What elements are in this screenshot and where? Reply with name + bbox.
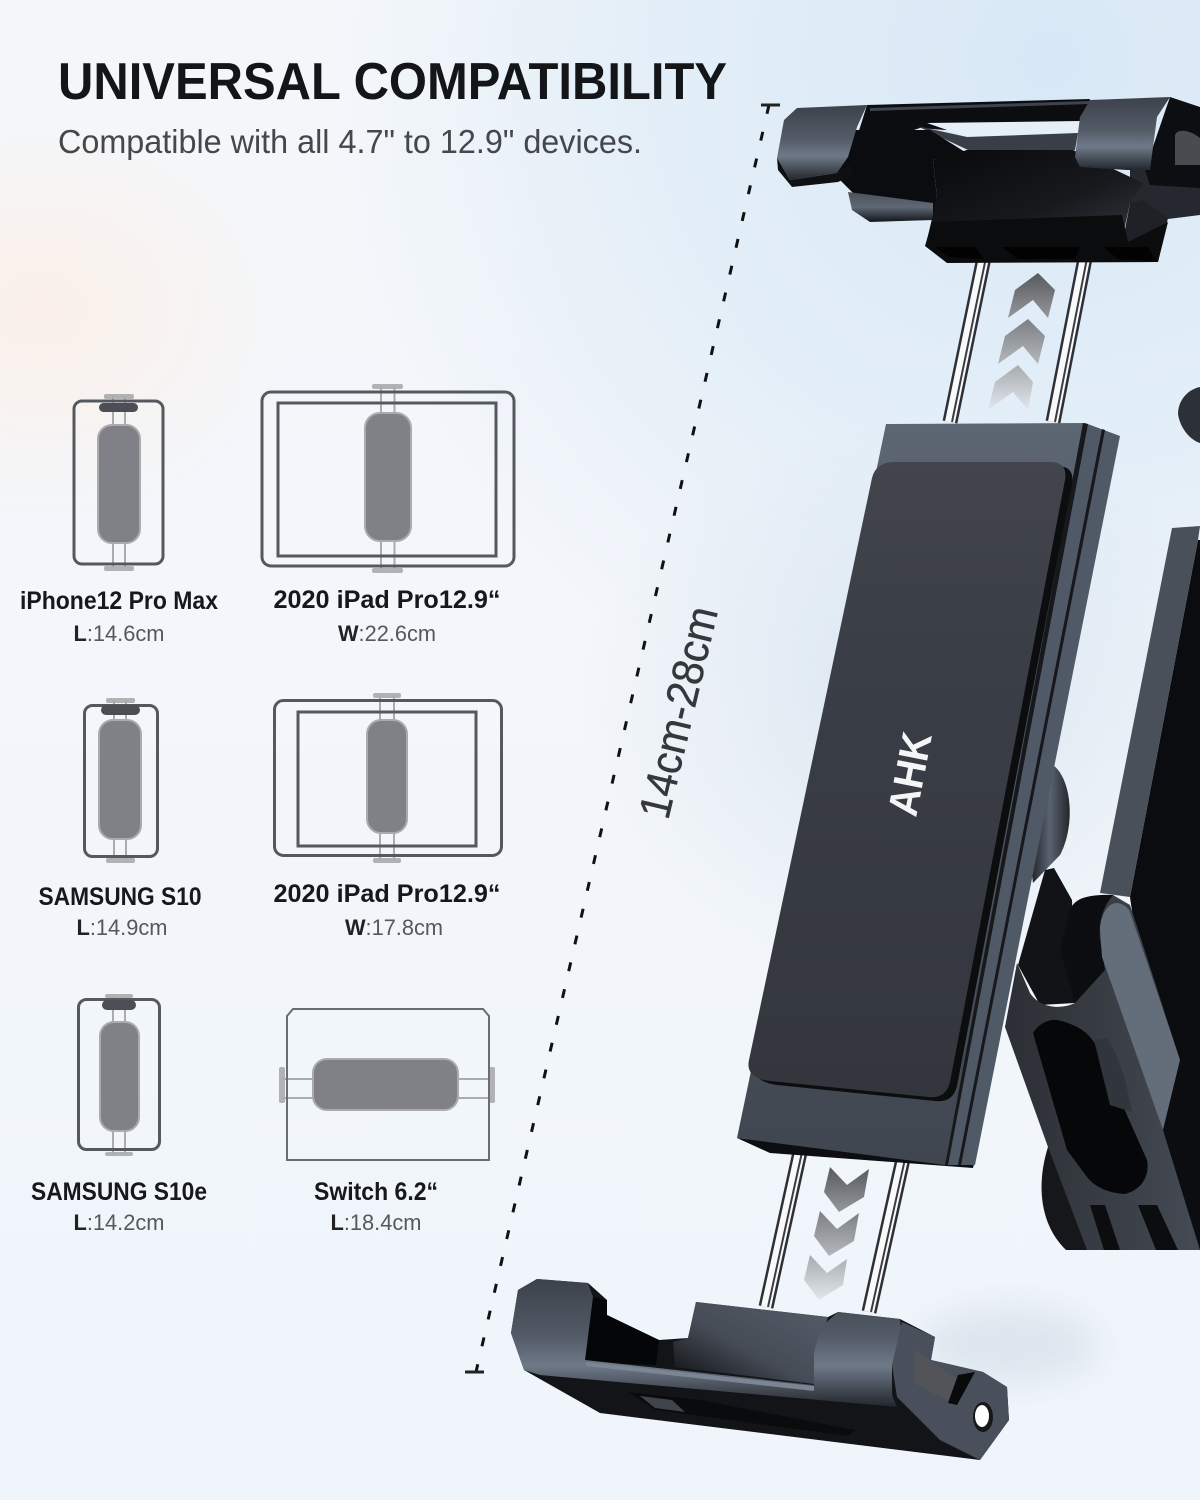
ball joint — [1018, 868, 1075, 1005]
panel front face — [737, 423, 1085, 1165]
panel bottom lip — [737, 1138, 975, 1168]
arm ribs — [1090, 1205, 1178, 1250]
hinge hole — [973, 1402, 993, 1432]
stand base wheel — [1042, 1147, 1200, 1250]
clamp body — [511, 1279, 1009, 1460]
device: SAMSUNG S10e — [31, 994, 207, 1235]
device: SAMSUNG S10e: SAMSUNG S10e — [31, 1178, 207, 1206]
top rods — [950, 243, 1090, 422]
device: Switch 6.2: L:18.4cm — [330, 1210, 422, 1235]
window — [927, 121, 1080, 140]
device: SAMSUNG S10: L:14.9cm — [76, 915, 168, 940]
long front band — [511, 1279, 902, 1407]
right cap — [1075, 97, 1170, 170]
top arrows — [988, 273, 1055, 410]
pad shadow — [755, 466, 1072, 1101]
top clamp — [777, 97, 1200, 263]
rear knob top right — [1178, 387, 1200, 443]
arm plate — [1005, 895, 1200, 1250]
device: 2020 iPad Pro 17.8cm — [274, 693, 502, 940]
left cap — [777, 105, 867, 180]
device: SAMSUNG S10: SAMSUNG S10 — [38, 883, 202, 911]
top rail — [853, 99, 1090, 150]
bottom clamp — [511, 1279, 1009, 1460]
central block — [927, 150, 1143, 240]
device: Switch 6.2: Switch 6.2“ — [314, 1178, 438, 1206]
dimension line — [465, 105, 780, 1372]
device: SAMSUNG S10 — [38, 698, 202, 940]
device: SAMSUNG S10e: L:14.2cm — [74, 1210, 164, 1235]
lower slot — [628, 1392, 855, 1436]
device: iPhone12 Pro Max: L:14.6cm — [74, 621, 164, 646]
device: 2020 iPad Pro 17.8cm: W:17.8cm — [345, 915, 443, 940]
device: iPhone12 Pro Max — [20, 394, 218, 646]
right hook — [1145, 97, 1200, 188]
arm dark lower right — [1163, 1060, 1200, 1250]
lower lip — [925, 215, 1168, 263]
panel bevel — [945, 423, 1120, 1165]
arm slot — [1033, 1020, 1148, 1194]
black wedge — [585, 1297, 659, 1365]
ledge highlight — [586, 1362, 814, 1391]
bottom arrows — [804, 1167, 869, 1300]
left dark mass — [835, 130, 965, 220]
rear plate right — [1130, 170, 1200, 230]
arm light face — [1100, 903, 1180, 1130]
swivel knob — [1030, 763, 1070, 883]
background device panel — [1100, 526, 1200, 1250]
device: iPhone12 Pro Max: iPhone12 Pro Max — [20, 587, 218, 615]
bottom rods — [766, 1143, 907, 1312]
right hinge — [892, 1322, 1009, 1460]
device: 2020 iPad Pro 22.6cm — [262, 384, 514, 646]
phone pad — [748, 462, 1065, 1097]
title: UNIVERSAL COMPATIBILITY — [58, 53, 727, 111]
arm hinge dark top — [1060, 895, 1113, 1003]
hook recess — [914, 1350, 958, 1403]
device: 2020 iPad Pro 22.6cm: 2020 iPad Pro12.9“ — [274, 586, 500, 614]
device: 2020 iPad Pro 17.8cm: 2020 iPad Pro12.9“ — [274, 880, 500, 908]
dimension label: 14cm-28cm — [630, 602, 728, 823]
main panel — [737, 423, 1120, 1168]
device: 2020 iPad Pro 22.6cm: W:22.6cm — [338, 621, 436, 646]
subtitle: Compatible with all 4.7" to 12.9" devices. — [58, 123, 642, 160]
lower left roll — [848, 192, 933, 222]
stand arm — [1005, 763, 1200, 1250]
center plate — [673, 1302, 828, 1384]
right strut — [1122, 200, 1168, 262]
device: Switch 6.2 — [279, 1009, 495, 1235]
logo: AHK — [879, 728, 941, 820]
